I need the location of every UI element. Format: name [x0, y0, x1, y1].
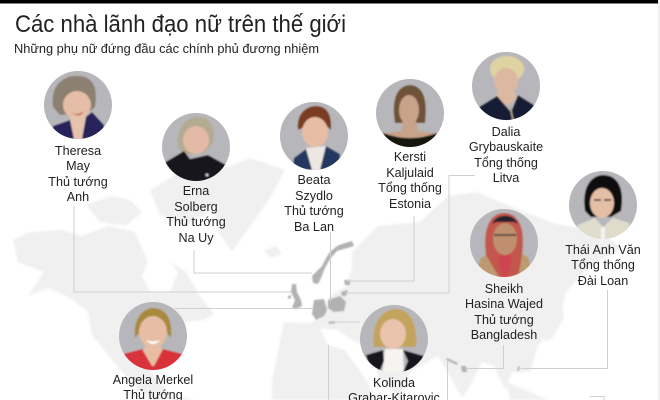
portrait: Sheikh Hasina Wajed — [470, 209, 538, 277]
Poland — [328, 296, 346, 312]
label: Erna Solberg: Solberg — [174, 200, 218, 214]
title: Các nhà lãnh đạo nữ trên thế giới — [15, 11, 346, 38]
label: Dalia Grybauskaite: Tổng thống — [474, 156, 538, 170]
label: Thái Anh Văn: Tổng thống — [571, 258, 635, 272]
portrait: Erna Solberg — [162, 113, 230, 181]
label: Angela Merkel: Angela Merkel — [113, 373, 193, 387]
label: Theresa May: May — [66, 159, 91, 173]
Norway — [312, 241, 354, 284]
label: Theresa May: Thủ tướng — [48, 175, 108, 189]
right edge strip — [658, 0, 660, 400]
label: Theresa May — [48, 144, 108, 204]
label: Thái Anh Văn: Thái Anh Văn — [565, 243, 641, 257]
label: Angela Merkel — [113, 373, 193, 400]
label: Sheikh Hasina Wajed: Hasina Wajed — [465, 297, 543, 311]
label: Kersti Kaljulaid: Kaljulaid — [386, 166, 434, 180]
label: Sheikh Hasina Wajed — [465, 282, 543, 342]
Taiwan — [517, 366, 520, 371]
label: Kersti Kaljulaid — [378, 150, 442, 211]
label: Dalia Grybauskaite: Litva — [493, 171, 519, 185]
label: Kersti Kaljulaid: Estonia — [389, 197, 431, 211]
portrait: Angela Merkel — [119, 302, 187, 370]
label: Beata Szydlo: Szydlo — [295, 189, 333, 203]
label: Beata Szydlo: Beata — [298, 173, 330, 187]
Croatia — [328, 321, 336, 324]
label: Theresa May: Theresa — [55, 144, 101, 158]
portrait: Kolinda Grabar-Kitarovic — [360, 305, 428, 372]
portrait: Theresa May — [44, 71, 112, 139]
portrait: Kersti Kaljulaid — [376, 79, 444, 147]
label: Kersti Kaljulaid: Tổng thống — [378, 181, 442, 195]
portrait: Dalia Grybauskaite — [472, 52, 540, 120]
label: Kolinda Grabar-Kitarovic: Kolinda — [373, 376, 415, 390]
label: Beata Szydlo: Thủ tướng — [284, 204, 344, 218]
label: Thái Anh Văn — [565, 243, 641, 288]
label: Beata Szydlo — [284, 173, 344, 234]
label: Sheikh Hasina Wajed: Sheikh — [485, 282, 523, 296]
Estonia — [344, 280, 350, 285]
portrait: Thái Anh Văn — [569, 171, 637, 239]
label: Dalia Grybauskaite: Dalia — [492, 125, 520, 139]
Germany — [312, 299, 327, 320]
label: Sheikh Hasina Wajed: Thủ tướng — [474, 313, 534, 327]
label: Thái Anh Văn: Đài Loan — [578, 274, 628, 288]
Lithuania — [341, 290, 348, 296]
world map — [13, 158, 622, 400]
label: Kolinda Grabar-Kitarovic — [348, 376, 440, 400]
label: Erna Solberg: Thủ tướng — [166, 215, 226, 229]
label: Sheikh Hasina Wajed: Bangladesh — [471, 328, 537, 342]
label: Erna Solberg: Erna — [183, 184, 209, 198]
United Kingdom — [291, 284, 302, 309]
label: Theresa May: Anh — [67, 190, 89, 204]
portrait: Beata Szydlo — [280, 102, 348, 170]
label: Erna Solberg — [166, 184, 226, 245]
connector lines — [74, 176, 608, 400]
label: Dalia Grybauskaite: Grybauskaite — [469, 140, 543, 154]
subtitle: Những phụ nữ đứng đầu các chính phủ đương nhiệm — [14, 41, 319, 56]
label: Kersti Kaljulaid: Kersti — [394, 150, 426, 164]
Bangladesh — [461, 366, 467, 372]
label: Beata Szydlo: Ba Lan — [294, 220, 334, 234]
label: Erna Solberg: Na Uy — [178, 231, 214, 245]
label: Dalia Grybauskaite — [469, 125, 543, 185]
top bar — [0, 0, 658, 4]
